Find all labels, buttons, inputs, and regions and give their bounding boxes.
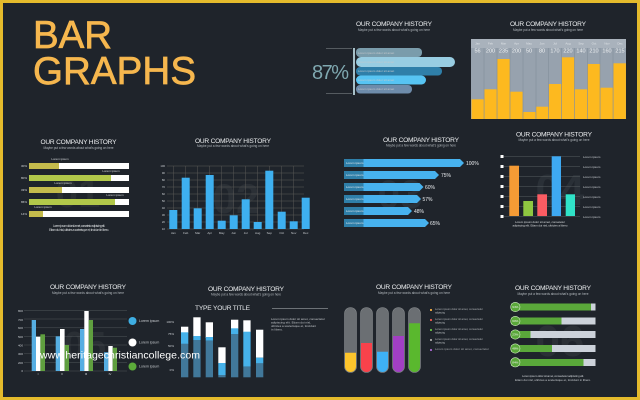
badge values: 84% — [512, 360, 519, 364]
green fills — [511, 304, 591, 366]
month labels: Aug — [565, 42, 571, 46]
panel: test tube bars — [344, 284, 489, 372]
green series — [40, 320, 117, 371]
label tabs — [344, 159, 364, 227]
rule — [272, 307, 328, 310]
legend — [128, 317, 159, 370]
panel: grouped column chart — [18, 284, 159, 376]
ghost numeral: 01 — [56, 172, 100, 216]
panel: stacked columns with side text — [166, 286, 328, 377]
bracket — [326, 48, 352, 94]
subheading: Maybe put a few words about what's going on here — [44, 146, 114, 150]
column dividers — [484, 48, 613, 119]
x axis labels: III — [85, 372, 87, 376]
subheading: Maybe put a few words about what's going on here — [52, 291, 124, 295]
subheading: Maybe put a few words about what's going on here — [518, 138, 590, 142]
badge values: 94% — [512, 305, 519, 309]
row percent labels: 86% — [21, 200, 27, 204]
row percent labels: 30% — [21, 164, 27, 168]
value labels: 160 — [602, 48, 612, 54]
side text: ultricies a scelerisque et, tincidunt — [271, 324, 316, 328]
subheading: Maybe put a few words about what's going on here — [518, 292, 589, 296]
ghost numeral: 02 — [213, 175, 259, 222]
percentages: 48% — [414, 209, 425, 215]
legend text: Lorem ipsum dolor sit amet, consectetur — [435, 317, 483, 321]
value labels: 56 — [474, 48, 481, 54]
y axis labels: 0% — [170, 368, 174, 372]
right labels: Lorem ipsum — [583, 185, 601, 189]
right labels: Lorem ipsum — [583, 165, 601, 169]
side text — [271, 317, 325, 332]
subheading: Maybe put a few words about what's going on here — [378, 291, 450, 295]
legend text: Lorem ipsum dolor sit amet, consectetur — [435, 337, 483, 341]
month labels: Sep — [578, 42, 584, 46]
x axis labels: IV — [109, 372, 111, 376]
pill labels: Lorem ipsum dolor sit amet — [358, 60, 394, 64]
right labels: Lorem ipsum — [583, 175, 601, 179]
row percent labels — [21, 164, 27, 216]
legend text: adipiscing — [435, 330, 445, 334]
x axis labels: Feb — [183, 231, 189, 235]
y axis labels: 600 — [18, 326, 23, 330]
grid lines — [24, 310, 127, 371]
value labels: 170 — [550, 48, 560, 54]
blue series — [32, 320, 108, 371]
track bars — [29, 163, 129, 217]
right labels — [583, 155, 601, 219]
ghost numeral: 04 — [536, 166, 585, 215]
watermark url: www.heritagechristiancollege.com — [39, 350, 200, 362]
month labels: Dec — [617, 42, 623, 46]
y axis labels: 50% — [168, 344, 174, 348]
badges — [511, 302, 520, 367]
y axis labels: 90 — [162, 171, 165, 175]
row percent labels: 14% — [21, 212, 27, 216]
subheading: Maybe put a few words about what's going on here — [513, 28, 583, 32]
main title — [33, 14, 196, 93]
filled bars — [29, 163, 115, 217]
y axis labels: 300 — [18, 352, 23, 356]
caption: adipiscing elit. Etiam dui nisl, ultricies a libero — [512, 224, 568, 228]
x axis labels: Jul — [244, 231, 248, 235]
subheading: Maybe put a few words about what's going on here — [197, 144, 269, 148]
tab labels: Lorem ipsum — [346, 209, 364, 213]
y axis labels: 800 — [18, 309, 23, 313]
marker labels: Lorem ipsum — [34, 205, 52, 209]
row percent labels: 80% — [21, 176, 27, 180]
ghost numeral: 06 — [536, 317, 584, 366]
panel: horizontal progress bars — [21, 139, 129, 232]
pills — [356, 48, 455, 94]
tab labels: Lorem ipsum — [346, 221, 364, 225]
divider — [353, 48, 355, 95]
chart title: TYPE YOUR TITLE — [195, 305, 251, 312]
ghost numeral: 03 — [378, 173, 422, 217]
x axis labels: Mar — [195, 231, 200, 235]
right labels: Lorem ipsum — [583, 155, 601, 159]
y axis labels: 700 — [18, 318, 23, 322]
panel: 87 percent stacked pills — [312, 21, 455, 95]
marker labels — [34, 157, 124, 209]
month labels: Mar — [501, 42, 506, 46]
value labels: 140 — [576, 48, 586, 54]
x axis labels: Dec — [303, 231, 309, 235]
main title: GRAPHS — [33, 50, 196, 93]
blue segments — [181, 328, 263, 375]
panel: blue monthly column chart — [160, 138, 310, 235]
heading: OUR COMPANY HISTORY — [383, 137, 460, 144]
caption: Etiam dui nisl, ultricies a scelerisque et, tincidunt in libero. — [515, 378, 591, 382]
ghost numeral: 05 — [64, 325, 106, 367]
legend text: Lorem ipsum dolor sit amet, consectetur — [435, 327, 483, 331]
heading: OUR COMPANY HISTORY — [50, 284, 127, 291]
caption — [515, 374, 591, 382]
legend: Lorem ipsum — [139, 319, 159, 323]
month labels: Nov — [604, 42, 610, 46]
month labels: Jun — [540, 42, 545, 46]
percentages: 60% — [425, 185, 436, 191]
value labels: 235 — [499, 48, 508, 54]
y axis labels: 30 — [162, 213, 165, 217]
y axis labels — [160, 164, 165, 231]
heading: OUR COMPANY HISTORY — [510, 21, 587, 28]
panel: yellow monthly columns — [471, 21, 626, 119]
columns — [472, 57, 626, 119]
percentages: 75% — [441, 173, 452, 179]
x axis labels: II — [61, 372, 63, 376]
y axis labels: 80 — [162, 178, 165, 182]
pill labels: Lorem ipsum dolor sit amet — [358, 87, 394, 91]
month labels: Jul — [553, 42, 557, 46]
x axis labels — [38, 372, 111, 376]
row percent labels: 33% — [21, 188, 27, 192]
tab labels: Lorem ipsum — [346, 161, 364, 165]
x axis labels: Oct — [279, 231, 284, 235]
tab labels: Lorem ipsum — [346, 173, 364, 177]
x axis labels: Apr — [207, 231, 212, 235]
value labels: 200 — [512, 48, 521, 54]
axis markers — [500, 155, 504, 218]
grid — [167, 166, 304, 229]
y axis labels: 100% — [166, 320, 174, 324]
pill labels: Lorem ipsum dolor sit amet — [358, 51, 394, 55]
right labels: Lorem ipsum — [583, 205, 601, 209]
badge values — [512, 305, 519, 364]
value labels: 200 — [486, 48, 495, 54]
value labels: 210 — [589, 48, 599, 54]
y axis labels: 10 — [162, 227, 165, 231]
month labels — [475, 42, 623, 46]
tube tracks — [344, 308, 420, 372]
month labels: May — [526, 42, 532, 46]
legend text — [435, 307, 489, 351]
heading: OUR COMPANY HISTORY — [516, 132, 593, 138]
month labels: Oct — [592, 42, 596, 46]
tube fills — [345, 323, 420, 372]
tab labels — [346, 161, 364, 225]
y axis labels: 20 — [162, 220, 165, 224]
y axis labels: 50 — [162, 199, 165, 203]
dark segments — [181, 334, 263, 377]
pill labels — [358, 51, 394, 91]
y axis labels: 40 — [162, 206, 165, 210]
white segments — [181, 317, 263, 363]
x axis labels: May — [219, 231, 225, 235]
legend text: adipiscing — [435, 340, 445, 344]
big percentage: 87% — [312, 62, 349, 84]
x axis labels: Jan — [171, 231, 176, 235]
x axis labels — [171, 231, 309, 235]
y axis labels — [166, 320, 174, 372]
percentages: 100% — [466, 161, 479, 167]
marker labels: Lorem ipsum — [51, 157, 69, 161]
y axis labels: 400 — [18, 344, 23, 348]
arrow bars — [360, 159, 464, 227]
month labels: Apr — [514, 42, 519, 46]
badge values: 23% — [512, 332, 519, 336]
side text: Lorem ipsum dolor sit amet, consectetur — [271, 317, 325, 321]
caption: Lorem ipsum dolor sit amet, consectetur adipiscing elit. — [522, 374, 584, 378]
subheading: Maybe put a few words about what's going on here — [211, 292, 281, 296]
x axis labels: I — [38, 372, 39, 376]
y axis labels: 200 — [18, 361, 23, 365]
percentages — [414, 161, 479, 227]
bars — [509, 156, 575, 216]
badge values: 60% — [512, 319, 519, 323]
pill labels: Lorem ipsum dolor sit amet — [358, 69, 394, 73]
y axis labels — [18, 309, 23, 373]
tracks — [511, 304, 596, 366]
x axis labels: Jun — [231, 231, 236, 235]
y axis labels: 60 — [162, 192, 165, 196]
panel: green progress bars with badges — [511, 285, 596, 382]
panel: multi-colour column chart — [500, 132, 601, 228]
subheading: Maybe put a few words about what's going on here — [386, 144, 456, 148]
heading: OUR COMPANY HISTORY — [356, 21, 433, 28]
bars — [169, 171, 310, 229]
subheading: Maybe put a few words about what's going on here — [358, 28, 430, 32]
x axis labels: Nov — [291, 231, 297, 235]
panel: arrow bars with percentages — [344, 137, 479, 227]
y axis labels: 500 — [18, 335, 23, 339]
percentages: 65% — [430, 221, 441, 227]
percentages: 57% — [422, 197, 433, 203]
month labels: Feb — [488, 42, 493, 46]
tab labels: Lorem ipsum — [346, 185, 364, 189]
main title: BAR — [33, 14, 112, 57]
badge values: 48% — [512, 346, 519, 350]
legend text: adipiscing — [435, 310, 445, 314]
tab labels: Lorem ipsum — [346, 197, 364, 201]
heading: OUR COMPANY HISTORY — [515, 285, 592, 292]
header strip — [471, 39, 626, 48]
value labels: 215 — [615, 48, 625, 54]
side text: adipiscing elit. Etiam dui nisl, — [271, 320, 311, 324]
legend text: Lorem ipsum dolor sit amet, consectetur — [435, 307, 483, 311]
caption: Etiam dui nisl, ultricies a scelerisque et, tincidunt in libero. — [49, 228, 109, 232]
heading: OUR COMPANY HISTORY — [195, 138, 272, 145]
value labels: 80 — [539, 48, 545, 54]
x axis labels: Aug — [255, 231, 261, 235]
value labels: 220 — [563, 48, 573, 54]
y axis labels: 75% — [168, 332, 174, 336]
heading: OUR COMPANY HISTORY — [376, 284, 453, 291]
marker labels: Lorem ipsum — [54, 181, 72, 185]
right labels: Lorem ipsum — [583, 195, 601, 199]
legend: Lorem ipsum — [139, 340, 159, 344]
legend text: Lorem ipsum dolor sit amet, consectetur — [435, 347, 489, 351]
legend bullets — [430, 309, 432, 351]
y axis labels: 0 — [21, 369, 23, 373]
right labels: Lorem ipsum — [583, 215, 601, 219]
pill labels: Lorem ipsum dolor sit amet — [358, 78, 394, 82]
caption: Lorem ipsum dolor sit amet, consetetur — [515, 220, 565, 224]
side text: in libero. — [271, 328, 283, 332]
value labels: 50 — [526, 48, 532, 54]
caption: Lorem ipsum dolor sit amet, consetetur adipiscing elit. — [53, 224, 105, 228]
month labels: Jan — [475, 42, 480, 46]
legend: Lorem ipsum — [139, 364, 159, 368]
heading: OUR COMPANY HISTORY — [208, 286, 285, 293]
white series — [36, 311, 113, 371]
heading: OUR COMPANY HISTORY — [40, 139, 117, 146]
legend text: adipiscing — [435, 320, 445, 324]
marker labels: Lorem ipsum — [106, 193, 124, 197]
chart background — [471, 39, 626, 119]
marker labels: Lorem ipsum — [102, 169, 120, 173]
y axis labels: 100 — [160, 164, 165, 168]
caption — [49, 224, 109, 232]
value labels — [474, 48, 625, 54]
x axis labels: Sep — [267, 231, 272, 235]
caption — [512, 220, 568, 228]
grid lines — [503, 156, 580, 216]
y axis labels: 70 — [162, 185, 165, 189]
